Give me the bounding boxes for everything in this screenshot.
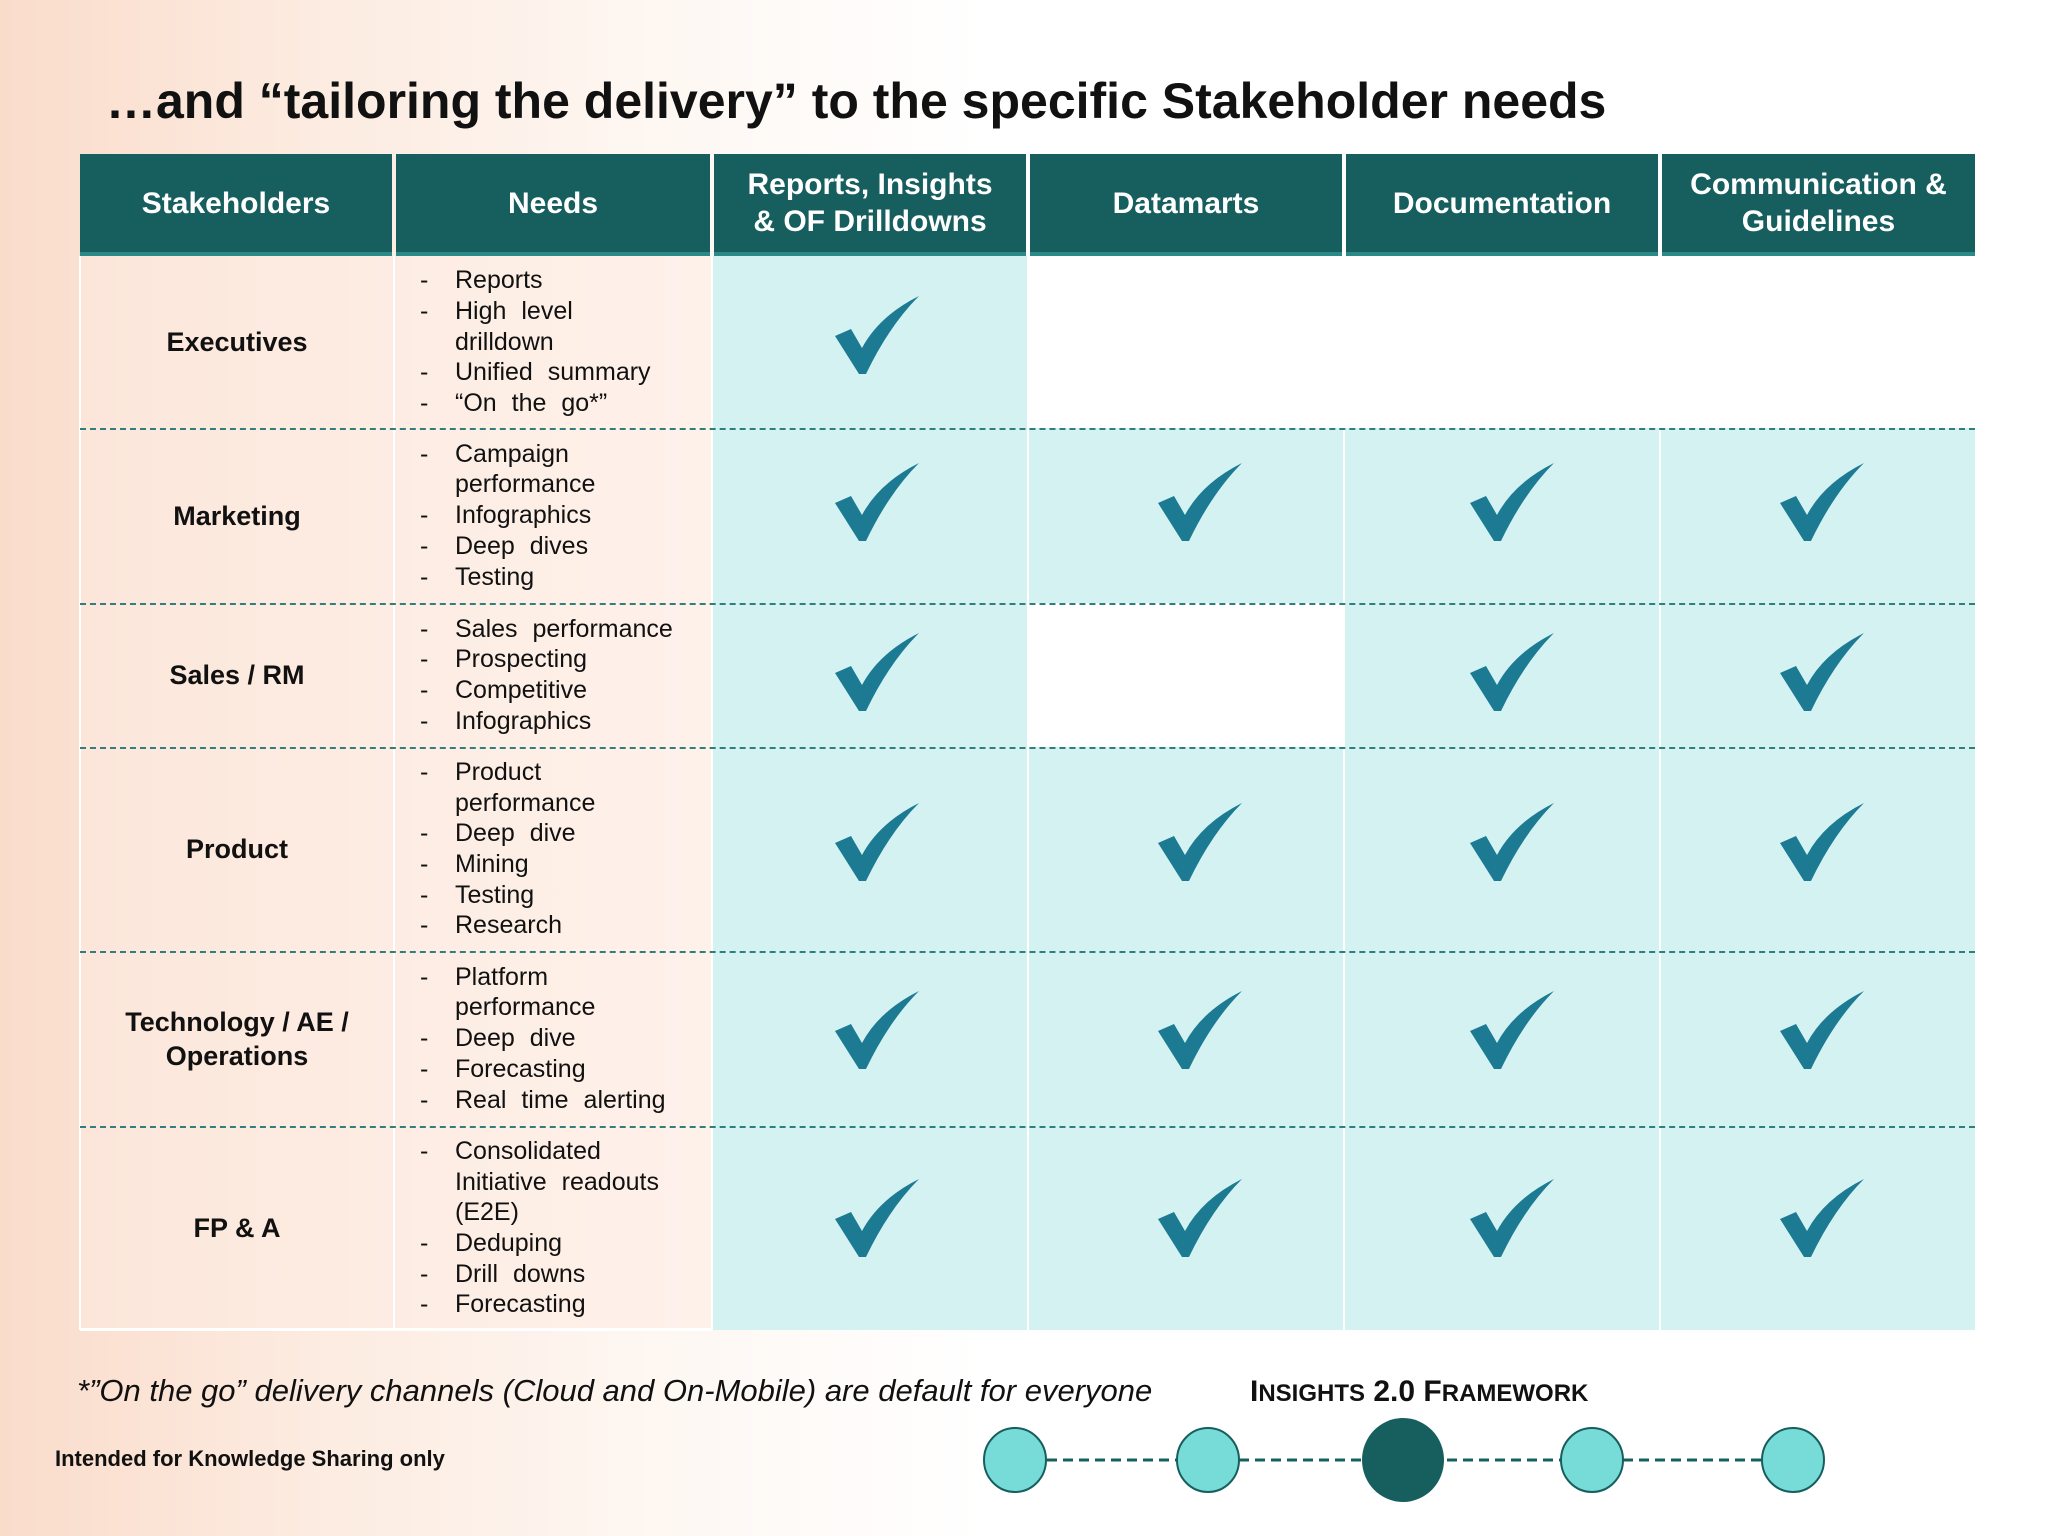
row: Executives: Executives bbox=[166, 327, 308, 357]
header row: Guidelines bbox=[1742, 205, 1895, 238]
row: Product: Mining bbox=[455, 850, 529, 878]
row: Executives: drilldown bbox=[455, 328, 554, 356]
header row: & OF Drilldowns bbox=[753, 205, 987, 238]
row: Product bbox=[186, 758, 595, 939]
row: Product: performance bbox=[455, 789, 595, 817]
row: Product: Deep dive bbox=[455, 819, 576, 847]
disclaimer: Intended for Knowledge Sharing only bbox=[55, 1446, 445, 1471]
header row: Reports, Insights bbox=[747, 168, 993, 201]
row: FP & A: Consolidated bbox=[455, 1137, 601, 1165]
row: FP & A: (E2E) bbox=[455, 1198, 519, 1226]
framework label: INSIGHTS 2.0 FRAMEWORK bbox=[1250, 1375, 1588, 1408]
row: Marketing: Marketing bbox=[173, 500, 301, 530]
row: FP & A: Drill downs bbox=[455, 1260, 585, 1288]
row: Executives: High level bbox=[455, 297, 573, 325]
framework progress stepper bbox=[983, 1418, 1825, 1502]
row: FP & A: Deduping bbox=[455, 1229, 562, 1257]
footnote: *”On the go” delivery channels (Cloud and On-Mobile) are default for everyone bbox=[77, 1373, 1152, 1408]
row: FP & A: Forecasting bbox=[455, 1290, 586, 1318]
row: Technology: Forecasting bbox=[455, 1055, 586, 1083]
header row: Communication & bbox=[1690, 168, 1947, 201]
row: Executives: Unified summary bbox=[455, 358, 651, 386]
row: FP & A: FP & A bbox=[193, 1213, 280, 1243]
row: Executives bbox=[166, 266, 651, 417]
header row: Datamarts bbox=[1113, 186, 1259, 220]
header row: Documentation bbox=[1393, 186, 1611, 220]
row: Product: Product bbox=[455, 758, 541, 786]
row: Marketing: Deep dives bbox=[455, 532, 588, 560]
row: Sales / RM: Infographics bbox=[455, 707, 591, 735]
row: Product: Research bbox=[455, 911, 562, 939]
row: Executives: “On the go*” bbox=[455, 389, 607, 417]
row: Technology: Platform bbox=[455, 963, 548, 991]
row: FP & A bbox=[193, 1137, 659, 1318]
row: Technology bbox=[125, 963, 666, 1114]
row: Technology: performance bbox=[455, 993, 595, 1021]
row: Marketing: performance bbox=[455, 470, 595, 498]
row: Technology: Deep dive bbox=[455, 1024, 576, 1052]
header row: Needs bbox=[508, 186, 598, 220]
header row: Stakeholders bbox=[142, 186, 330, 220]
row: Product: Testing bbox=[455, 881, 534, 909]
row: Marketing: Campaign bbox=[455, 440, 569, 468]
row: Sales / RM bbox=[169, 615, 673, 735]
row: Technology: Operations bbox=[166, 1040, 308, 1070]
header row bbox=[80, 154, 1975, 256]
title: …and “tailoring the delivery” to the specific Stakeholder needs bbox=[106, 73, 1606, 129]
row: Marketing bbox=[173, 440, 595, 591]
row: Sales / RM: Sales / RM bbox=[169, 660, 305, 690]
row: Technology: Real time alerting bbox=[455, 1086, 666, 1114]
row: Sales / RM: Prospecting bbox=[455, 645, 587, 673]
row: Product: Product bbox=[186, 834, 288, 864]
row: Marketing: Testing bbox=[455, 563, 534, 591]
row: Technology: Technology / AE / bbox=[125, 1006, 349, 1036]
row: Marketing: Infographics bbox=[455, 501, 591, 529]
row: FP & A: Initiative readouts bbox=[455, 1168, 659, 1196]
row: Sales / RM: Sales performance bbox=[455, 615, 673, 643]
row: Executives: Reports bbox=[455, 266, 543, 294]
row: Sales / RM: Competitive bbox=[455, 676, 587, 704]
